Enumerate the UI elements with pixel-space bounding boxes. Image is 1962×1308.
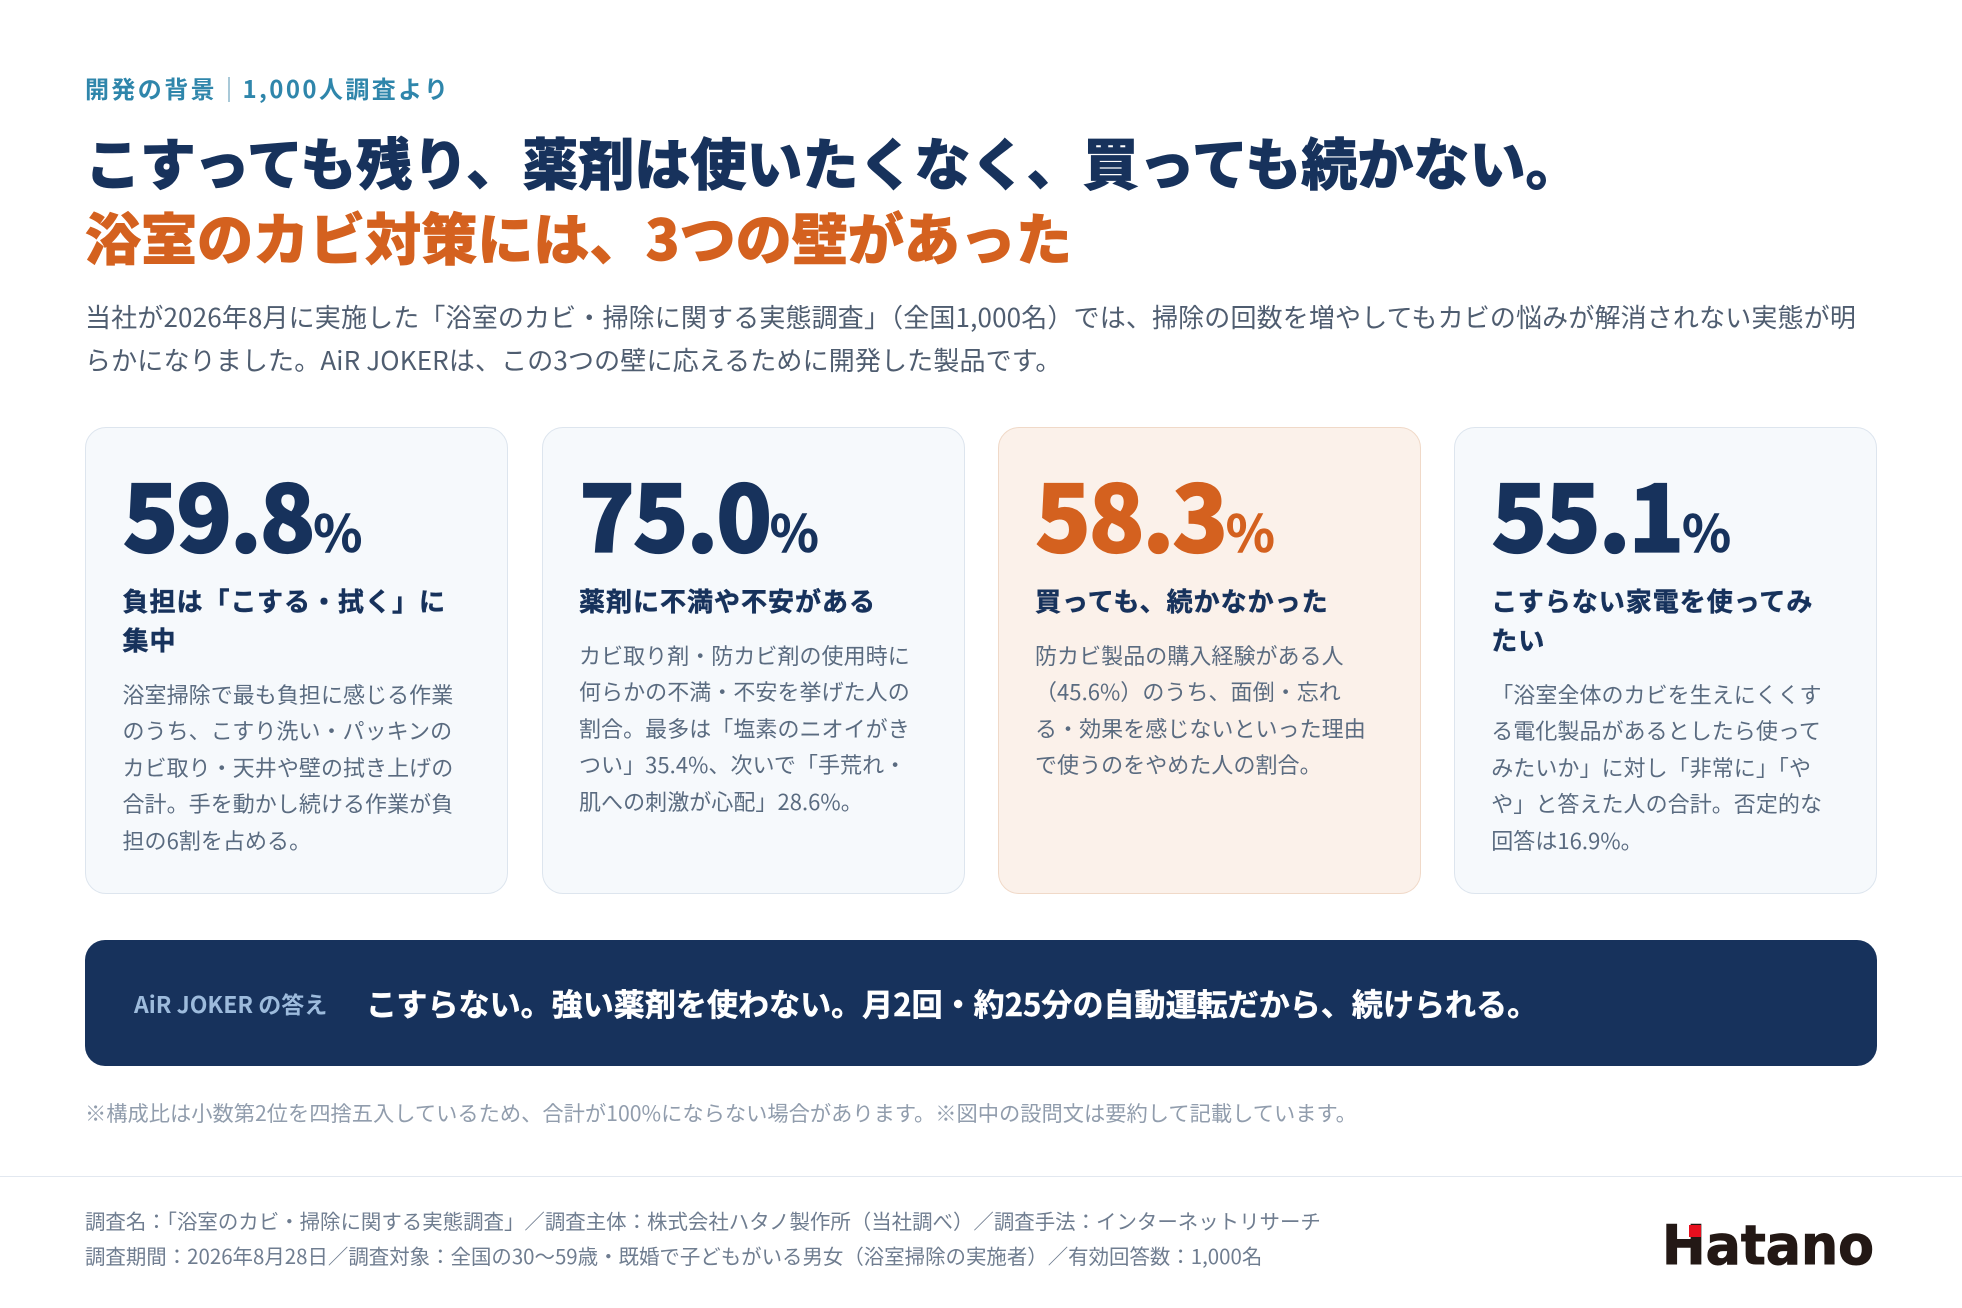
card body: る・効果を感じないといった理由 — [1035, 712, 1366, 744]
card body — [1035, 639, 1366, 780]
card heading: 負担は「こする・拭く」に — [122, 582, 446, 619]
stat 75.0%: 75.0% — [579, 446, 819, 579]
card body: 担の6割を占める。 — [122, 824, 311, 856]
card heading — [1491, 582, 1813, 658]
card body: 割合。最多は「塩素のニオイがき — [579, 712, 910, 744]
card body — [122, 678, 453, 856]
panel: card 75.0% — [542, 427, 965, 894]
title: 浴室のカビ対策には、3つの壁があった — [85, 196, 1072, 277]
card heading: たい — [1491, 621, 1545, 658]
card body: 肌への刺激が心配」28.6%。 — [579, 785, 863, 817]
card body: カビ取り・天井や壁の拭き上げの — [122, 751, 453, 783]
kicker: 開発の背景 1,000人調査より — [85, 70, 450, 105]
card heading: こすらない家電を使ってみ — [1491, 582, 1813, 619]
title: こすっても残り、薬剤は使いたくなく、買っても続かない。 — [85, 121, 1582, 202]
card body: 回答は16.9%。 — [1491, 824, 1643, 856]
card body: みたいか」に対し「非常に」「や — [1491, 751, 1811, 783]
banner label: AiR JOKER の答え — [134, 986, 327, 1020]
panel: card 59.8% — [85, 427, 508, 894]
card heading: 薬剤に不満や不安がある — [579, 582, 876, 619]
answer banner — [85, 940, 1877, 1066]
card heading — [122, 582, 446, 658]
card body: （45.6%）のうち、面倒・忘れ — [1035, 675, 1341, 707]
panel: card 58.3% highlighted — [998, 427, 1421, 894]
title — [85, 121, 1582, 277]
stat 59.8%: 59.8% — [122, 446, 362, 579]
stat 58.3%: 58.3% — [1035, 446, 1275, 579]
card body: 合計。手を動かし続ける作業が負 — [122, 787, 453, 819]
card body: 何らかの不満・不安を挙げた人の — [579, 675, 910, 707]
card body: カビ取り剤・防カビ剤の使用時に — [579, 639, 910, 671]
card body — [1491, 678, 1822, 856]
card body: で使うのをやめた人の割合。 — [1035, 748, 1322, 780]
card body: 防カビ製品の購入経験がある人 — [1035, 639, 1344, 671]
survey details — [85, 1205, 1321, 1270]
card body: のうち、こすり洗い・パッキンの — [122, 714, 452, 746]
card body: 浴室掃除で最も負担に感じる作業 — [122, 678, 453, 710]
card heading: 買っても、続かなかった — [1035, 582, 1329, 619]
stat 55.1%: 55.1% — [1491, 446, 1731, 579]
intro text: 当社が2026年8月に実施した「浴室のカビ・掃除に関する実態調査」（全国1,000名）では、掃除の回数を増やしてもカビの悩みが解消されない実態が明 — [85, 298, 1856, 335]
intro text: らかになりました。AiR JOKERは、この3つの壁に応えるために開発した製品です。 — [85, 340, 1061, 378]
card body — [579, 639, 910, 817]
panel: card 55.1% — [1454, 427, 1877, 894]
card body: つい」35.4%、次いで「手荒れ・ — [579, 748, 906, 780]
survey details: 調査名：「浴室のカビ・掃除に関する実態調査」／調査主体：株式会社ハタノ製作所（当社調べ）／調査手法：インターネットリサーチ — [85, 1205, 1321, 1235]
survey details: 調査期間：2026年8月28日／調査対象：全国の30〜59歳・既婚で子どもがいる男女（浴室掃除の実施者）／有効回答数：1,000名 — [85, 1240, 1262, 1270]
intro text — [85, 298, 1856, 378]
card body: 「浴室全体のカビを生えにくくす — [1491, 678, 1822, 710]
card body: や」と答えた人の合計。否定的な — [1491, 787, 1822, 819]
card heading: 集中 — [122, 621, 177, 658]
banner message: こすらない。強い薬剤を使わない。月2回・約25分の自動運転だから、続けられる。 — [366, 980, 1538, 1025]
card body: る電化製品があるとしたら使って — [1491, 714, 1821, 746]
footnote: ※構成比は小数第2位を四捨五入しているため、合計が100%にならない場合があります。※図中の設問文は要約して記載しています。 — [85, 1097, 1357, 1128]
